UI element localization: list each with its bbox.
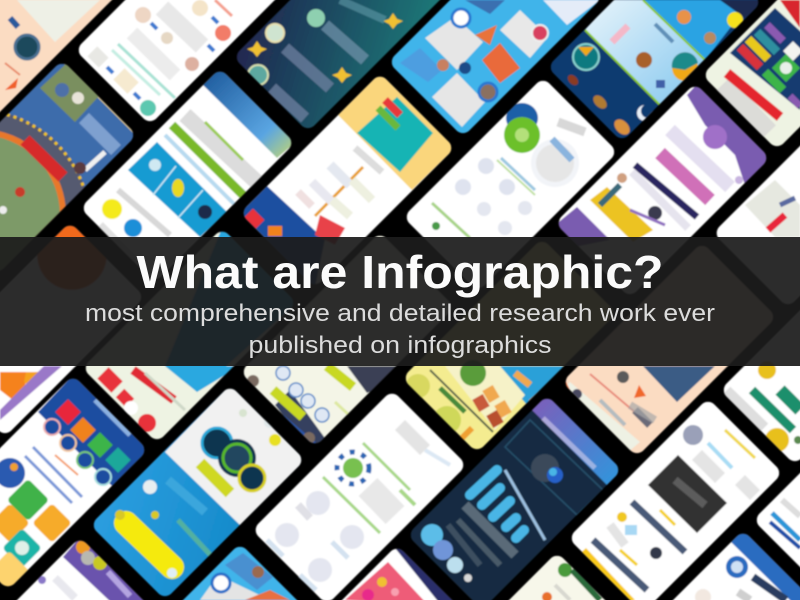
card: dark teal list <box>233 0 448 132</box>
card: bottom purple <box>16 540 144 600</box>
card: yellow trees <box>402 238 617 453</box>
card: bottom pale green <box>508 554 606 600</box>
card: yellow timeline <box>240 73 455 288</box>
card: blue header with coloured tags <box>0 375 148 593</box>
card: hexagon cluster <box>252 390 467 600</box>
card: white flow <box>75 0 290 125</box>
card: pale chain with people <box>240 232 455 452</box>
card: gray circles and blue yellow oval <box>90 385 305 600</box>
card: banner-left orange <box>0 220 145 437</box>
card: right green pills <box>722 310 800 462</box>
title: What are Infographic? <box>136 246 664 298</box>
subtitle line 1: most comprehensive and detailed research work ever <box>85 300 715 327</box>
card: peach diagram <box>0 0 114 114</box>
card: bottom sky blue <box>182 546 298 600</box>
card: bottom right shield <box>672 532 800 600</box>
blue header of tag card <box>38 375 148 487</box>
subtitle line 2: published on infographics <box>248 332 552 359</box>
card: sky blue profiles <box>388 0 603 137</box>
card: nutrition navy and sky <box>547 0 770 142</box>
card: pale red shapes <box>82 228 297 443</box>
card: peach lines <box>560 242 777 457</box>
card: white with dark photo <box>568 398 783 600</box>
card: green bar and blue tiles <box>80 68 295 283</box>
banner: dark overlay <box>0 237 800 366</box>
card: lime citrus <box>403 77 618 292</box>
card: bottom navy pink <box>340 548 454 600</box>
gradient header strip <box>532 395 622 485</box>
card: dark navy with blue pills <box>407 395 622 600</box>
card: right white partial <box>713 93 800 308</box>
card: right blue stripes <box>756 472 800 568</box>
upper section <box>165 385 305 525</box>
card: pale with navy panel <box>702 0 800 150</box>
card: blue road with tan header <box>0 62 134 270</box>
card: purple header <box>555 83 772 298</box>
header of green-bar card <box>203 68 295 158</box>
